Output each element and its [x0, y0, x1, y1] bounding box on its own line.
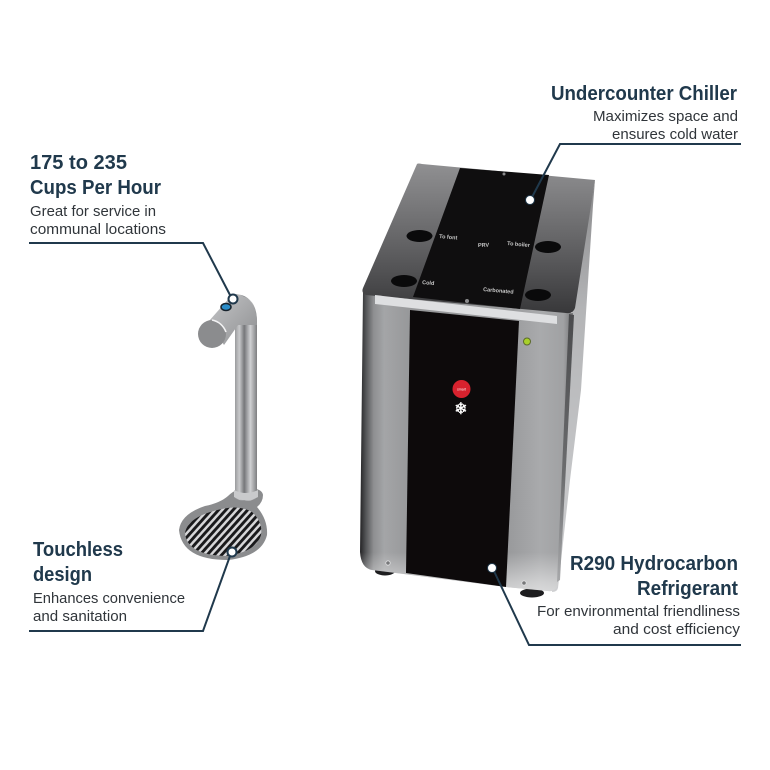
- callout: undercounter chiller: ensures cold water: [612, 126, 738, 143]
- top panel screws: [465, 172, 506, 303]
- callout: undercounter chiller: Undercounter Chiller: [551, 83, 737, 105]
- column base collar: [234, 490, 258, 500]
- water tap: [179, 294, 267, 560]
- callout: cups per hour: 175 to 235: [30, 152, 127, 174]
- callout: cups per hour: [29, 152, 238, 304]
- callout: touchless design: and sanitation: [33, 608, 127, 625]
- silver front trim bar: [375, 295, 557, 324]
- callout: R290 refrigerant: R290 Hydrocarbon: [570, 553, 738, 575]
- chiller feet: [375, 566, 544, 598]
- top panel port labels: To boiler: [507, 241, 531, 249]
- chiller top panel: [362, 164, 595, 313]
- front black stripe: [406, 310, 519, 587]
- callout: cups per hour: communal locations: [30, 221, 166, 238]
- callout: R290 refrigerant: For environmental friendliness: [537, 603, 740, 620]
- red logo badge: [452, 380, 470, 398]
- port holes: [391, 230, 561, 301]
- sensor button: [221, 304, 231, 310]
- top panel port labels: To font: [439, 234, 458, 242]
- chiller right side panel: [552, 180, 595, 592]
- corner shadow strip: [557, 314, 574, 582]
- top panel port labels: Cold: [422, 280, 435, 287]
- chiller front panel: [360, 292, 573, 591]
- tap head: [209, 295, 257, 345]
- callout: touchless design: design: [33, 564, 92, 586]
- status light: [524, 338, 530, 345]
- callout: undercounter chiller: Maximizes space and: [593, 108, 738, 125]
- front screws: [386, 561, 526, 585]
- drip tray and flange: [179, 488, 267, 560]
- callout: cups per hour: Great for service in: [30, 203, 156, 220]
- callout: touchless design: [29, 539, 236, 631]
- top panel port labels: PRV: [478, 243, 490, 249]
- drip grate: [185, 508, 261, 556]
- top panel port labels: Carbonated: [483, 287, 514, 296]
- callout: touchless design: Touchless: [33, 539, 123, 561]
- tap end cap: [198, 320, 226, 348]
- callout: undercounter chiller: [526, 83, 741, 204]
- callout: R290 refrigerant: Refrigerant: [637, 578, 738, 600]
- callout: R290 refrigerant: [488, 553, 741, 645]
- icon: snowflake: ❄: [454, 399, 468, 418]
- red logo badge: smart: [457, 388, 466, 392]
- top black stripe: [413, 168, 549, 309]
- front panel bottom sheen: [360, 292, 573, 591]
- chiller unit: [360, 164, 595, 598]
- top panel port labels: [422, 234, 531, 296]
- callout: touchless design: Enhances convenience: [33, 590, 185, 607]
- tap column: [235, 294, 257, 501]
- callout: cups per hour: Cups Per Hour: [30, 177, 161, 199]
- callout: R290 refrigerant: and cost efficiency: [613, 621, 741, 638]
